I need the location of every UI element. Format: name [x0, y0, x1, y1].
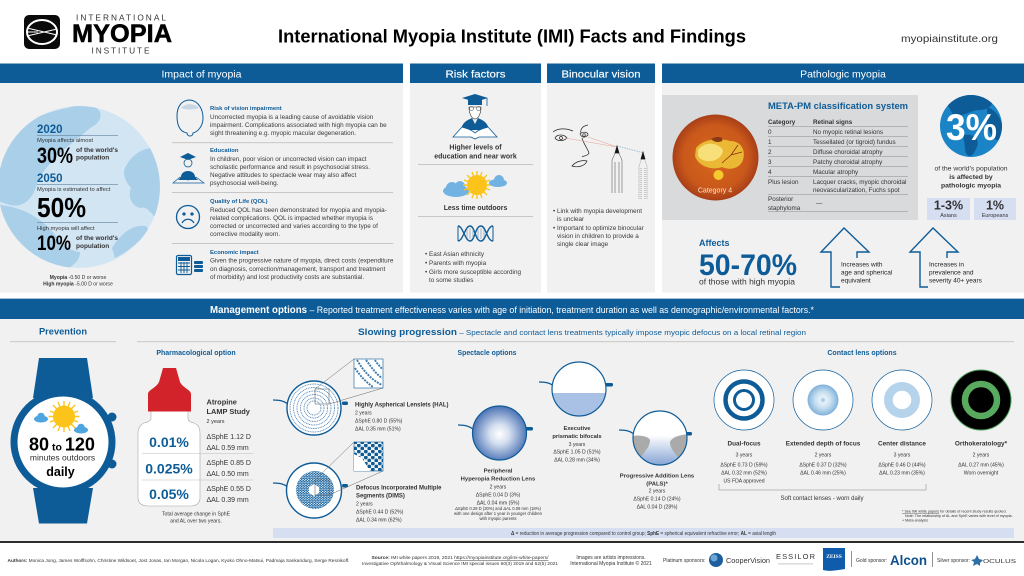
- heading: Pharmacological option: Pharmacological option: [156, 350, 236, 357]
- heading: Contact lens options: Contact lens options: [827, 350, 897, 357]
- source: Source: IMI white papers 2019, 2021 https://myopiainstitute.org/imi-white-papers/: [372, 555, 549, 560]
- panel: Pathologic myopia: [662, 64, 1024, 292]
- text: quality of life: related complications. QOL is impacted whether myopia is: [210, 215, 373, 222]
- heading: Slowing progression: Slowing progression – Spectacle and contact lens treatments typically impose myopic defocus on a local retinal region: [358, 327, 806, 337]
- stat: Europeans: 1%: [986, 198, 1004, 212]
- caption: bottle: [162, 512, 231, 524]
- myopia definitions: High myopia -5.00 D or worse: [43, 282, 113, 288]
- text: HAL: [355, 402, 449, 432]
- contact lens: Dual-focus: ΔSphE 0.73 D (59%): [720, 462, 768, 468]
- bullets: other risk factors: •: [425, 251, 427, 258]
- sponsors: gold: Gold sponsor:: [856, 558, 887, 564]
- contact lens: Center distance: Center distance: [878, 440, 926, 448]
- text: risk of vision impairment: sight threatening e.g. myopic macular degeneration.: [210, 130, 356, 137]
- icon: graduate: [173, 153, 204, 183]
- text: world's population affected: of the world's population: [934, 166, 1008, 172]
- stat: Europeans: Europeans: [982, 213, 1009, 219]
- sponsors: gold: Alcon: [890, 552, 927, 568]
- contact lens: Extended depth of focus: [786, 370, 861, 476]
- text: DIMS: Defocus Incorporated Multiple: [356, 486, 442, 492]
- sun: [48, 401, 80, 432]
- sponsors: platinum: Platinum sponsors:: [663, 558, 706, 564]
- text: DIMS: 2 years: [356, 502, 373, 508]
- bullets: binocular vision: •: [553, 225, 555, 232]
- footnotes: [902, 510, 1013, 522]
- title: International Myopia Institute (IMI) Facts and Findings: [278, 26, 746, 46]
- sponsors: platinum: ZEISS: [826, 554, 842, 560]
- heading: META-PM classification system: META-PM classification system: [768, 101, 908, 112]
- globe illustration: [0, 105, 162, 272]
- bullets: other risk factors: [425, 251, 521, 284]
- text: PALS: (PALS)*: [646, 482, 668, 488]
- stat: Europeans: [974, 198, 1016, 220]
- text: PALS: ΔAL 0.04 D (28%): [637, 504, 678, 510]
- legend bar: Δ = reduction in average progression compared to control group; SphE = spherical equivalent refractive error; AL = axial length: [511, 531, 776, 537]
- text: economic impact: of morbidity) and lost productivity costs are substantial.: [210, 274, 364, 281]
- text: quality of life: [210, 199, 387, 238]
- table: retinal signs: Lacquer cracks, myopic choroidal: [813, 179, 906, 186]
- footnotes: * See IMI white papers for details of recent study results quoted.: [902, 510, 1007, 514]
- text: atropine LAMP study: ΔAL 0.50 mm: [206, 471, 249, 478]
- text: education: Education: [210, 148, 239, 154]
- text: HAL: ΔAL 0.35 mm (51%): [355, 426, 401, 432]
- text: less time outdoors: Less time outdoors: [444, 205, 507, 212]
- contact lens: Dual-focus: US FDA approved: [723, 478, 765, 484]
- stat: 2050: 50%: [37, 192, 86, 223]
- stat: 2020: 30%: [37, 143, 73, 168]
- table: retinal signs: Posterior: [768, 196, 793, 203]
- text: PALS: ΔSphE 0.14 D (24%): [633, 496, 681, 502]
- text: economic impact: Given the progressive nature of myopia, direct costs (expenditure: [210, 258, 394, 264]
- text: atropine LAMP study: 2 years: [206, 419, 225, 425]
- heading: Risk factors: Risk factors: [446, 68, 506, 80]
- text: DIMS: [356, 486, 442, 524]
- icon: atropine bottle: 0.01%: [149, 434, 189, 450]
- bullets: other risk factors: Parents with myopia: [429, 260, 487, 267]
- contact lens: Dual-focus: [714, 370, 774, 484]
- bullets: other risk factors: East Asian ethnicity: [429, 251, 485, 258]
- table: retinal signs: Patchy choroidal atrophy: [813, 159, 883, 166]
- stat: 2050: 10%: [37, 232, 71, 255]
- text: Executive prismatic bifocals: [552, 426, 602, 464]
- text: Executive prismatic bifocals: ΔAL 0.28 mm (34%): [554, 458, 600, 464]
- table: retinal signs: neovascularization, Fuchs spot: [813, 187, 900, 194]
- icon: sad face: [176, 206, 200, 228]
- legend bar: [273, 528, 1014, 538]
- arrow: prevalence and severity: Increases in: [929, 262, 964, 268]
- icon: atropine bottle: 0.025%: [145, 460, 193, 476]
- stat: 2020: of the world's: [76, 147, 118, 154]
- globe: 3 percent: 3%: [946, 107, 997, 148]
- contact lens: Extended depth of focus: ΔSphE 0.37 D (32%): [799, 462, 847, 468]
- myopia definitions: [43, 275, 113, 288]
- bracket: soft contact lenses: [719, 484, 926, 502]
- sponsors: platinum: [663, 548, 852, 571]
- panel: Risk factors: [410, 64, 541, 292]
- arrow: prevalence and severity: [910, 228, 983, 287]
- text: atropine LAMP study: ΔSphE 0.85 D: [206, 460, 251, 467]
- text: world's population affected: [934, 166, 1008, 190]
- stat: 2050: of the world's: [76, 235, 118, 242]
- stat: 2020: population: [76, 154, 109, 162]
- stat: 2050: population: [76, 243, 109, 250]
- contact lens: Orthokeratology: [951, 370, 1011, 476]
- panel: Management options: [0, 298, 1024, 541]
- text: quality of life: corrective modality worn.: [210, 231, 280, 238]
- text: education: Negative attitudes to spectacle wear may also affect: [210, 172, 356, 179]
- bullets: binocular vision: Important to optimize binocular: [557, 225, 644, 232]
- heading: Management options: [0, 298, 1024, 319]
- footer: [0, 541, 1024, 571]
- table: retinal signs: —: [816, 200, 823, 207]
- text: PALS: [620, 474, 695, 510]
- bullets: binocular vision: [553, 208, 644, 248]
- stat: Asians: Asians: [940, 213, 957, 219]
- lens: Executive prismatic bifocals: [539, 362, 613, 464]
- bullets: other risk factors: to some studies: [429, 277, 473, 284]
- text: PALS: Progressive Addition Lens: [620, 474, 695, 480]
- source: [362, 555, 558, 566]
- text: risk of vision impairment: Risk of vision impairment: [210, 106, 282, 112]
- table: retinal signs: 4: [768, 169, 772, 176]
- lens: HAL: [273, 359, 449, 435]
- bullets: binocular vision: is unclear: [557, 216, 584, 223]
- text: Executive prismatic bifocals: Executive: [563, 426, 591, 432]
- icon: watch with outdoor time: [10, 358, 116, 524]
- logo: International Myopia Institute: INTERNATIONAL: [76, 12, 166, 22]
- globe: 3 percent: [940, 92, 1003, 157]
- icon: graduate with book: [453, 94, 497, 139]
- contact lens: Extended depth of focus: 2 years: [815, 452, 832, 458]
- stat: 2050: [37, 173, 118, 255]
- text: risk of vision impairment: impairment. Complications associated with high myopia can be: [210, 122, 387, 129]
- text: Peripheral Hyperopia Reduction Lens: Peripheral: [484, 468, 513, 474]
- table: retinal signs: Plus lesion: [768, 179, 799, 186]
- icon: eye cross section: [177, 100, 203, 136]
- arrow: age and spherical equivalent: age and spherical: [841, 270, 893, 276]
- arrow: prevalence and severity: severity 40+ years: [929, 278, 983, 284]
- bullets: binocular vision: Link with myopia development: [557, 208, 642, 215]
- text: risk of vision impairment: Uncorrected myopia is a leading cause of avoidable vision: [210, 114, 374, 121]
- text: world's population affected: pathologic myopia: [941, 182, 1001, 190]
- stat: 2050: Myopia is estimated to affect: [37, 187, 111, 193]
- text: Peripheral Hyperopia Reduction Lens: [454, 468, 543, 521]
- text: Peripheral Hyperopia Reduction Lens: with one design after 1 year in younger children: [454, 511, 543, 516]
- bullets: other risk factors: •: [425, 260, 427, 267]
- contact lens: Dual-focus: Dual-focus: [727, 440, 761, 448]
- lens: Peripheral Hyperopia Reduction: [454, 406, 543, 521]
- table: retinal signs: Tessellated (or tigroid) fundus: [813, 139, 896, 146]
- text: Peripheral Hyperopia Reduction Lens: ΔSphE 0.04 D (3%): [476, 492, 521, 498]
- text: atropine LAMP study: Atropine: [206, 398, 237, 406]
- heading: Impact of myopia: Impact of myopia: [162, 68, 242, 80]
- stat: Asians: 1-3%: [934, 198, 963, 212]
- META-PM classification panel: [662, 95, 918, 220]
- stat: 2050: High myopia will affect: [37, 226, 95, 232]
- text: atropine LAMP study: ΔAL 0.39 mm: [206, 497, 249, 504]
- stat: 2020: 2020: [37, 124, 63, 136]
- stat: 2020: Myopia affects almost: [37, 138, 93, 144]
- text: DIMS: Segments (DIMS): [356, 494, 405, 500]
- sponsors: silver: Silver sponsor:: [937, 558, 970, 564]
- arrow: age and spherical equivalent: [821, 228, 893, 287]
- bullets: other risk factors: Girls more susceptible according: [429, 269, 521, 276]
- stat: 50-70 percent: 50-70%: [699, 249, 797, 282]
- clouds: [34, 413, 88, 434]
- heading: Binocular vision: Binocular vision: [562, 68, 641, 80]
- text: world's population affected: is affected by: [949, 174, 993, 181]
- logo: International Myopia Institute: INSTITUTE: [92, 46, 150, 56]
- caption: bottle: and AL over two years.: [170, 518, 222, 524]
- text: quality of life: Reduced QOL has been demonstrated for myopia and myopia-: [210, 207, 387, 214]
- contact lens: Orthokeratology: Orthokeratology*: [955, 440, 1008, 448]
- stat: 50-70 percent: of those with high myopia: [699, 276, 795, 286]
- heading: Impact of myopia: [0, 64, 403, 83]
- fundus photograph: Category 4: [698, 188, 732, 194]
- text: education and near work: [434, 144, 517, 160]
- icon: sun and clouds: [443, 171, 507, 199]
- text: PALS: 2 years: [649, 488, 666, 494]
- contact lens: Dual-focus: ΔAL 0.32 mm (52%): [721, 470, 767, 476]
- text: HAL: 2 years: [355, 410, 372, 416]
- table: retinal signs: 1: [768, 139, 772, 146]
- table: retinal signs: Category: [768, 119, 796, 126]
- table: retinal signs: 2: [768, 149, 772, 156]
- text: Executive prismatic bifocals: ΔSphE 1.05 D (51%): [553, 450, 601, 456]
- icon: watch with outdoor time: minutes outdoors: [30, 452, 95, 462]
- contact lens: Orthokeratology: 2 years: [973, 452, 990, 458]
- text: atropine LAMP study: [206, 398, 251, 504]
- table: retinal signs: Macular atrophy: [813, 169, 859, 176]
- text: atropine LAMP study: LAMP Study: [206, 407, 251, 416]
- text: atropine LAMP study: ΔSphE 0.55 D: [206, 486, 251, 493]
- panel: Binocular vision: [547, 64, 655, 292]
- icon: watch with outdoor time: daily: [46, 465, 75, 479]
- text: education and near work: education and near work: [434, 154, 517, 160]
- heading: Spectacle options: Spectacle options: [458, 350, 517, 357]
- bracket: soft contact lenses: Soft contact lenses - worn daily: [780, 496, 864, 502]
- arrow: age and spherical equivalent: equivalent: [841, 278, 871, 284]
- arrow: prevalence and severity: prevalence and: [929, 270, 974, 276]
- footnotes: Note: The relationship of AL and SphE varies with level of myopia.: [905, 514, 1013, 518]
- watch text: 80 to 120: [29, 434, 95, 454]
- authors: Authors: Monica Jong, James Wolffsohn, Christine Wildsoet, Jost Jonas, Ian Morgan, Nicola Logan, Kyoko Ohno-Matsui, Padmaja Sankaridurg, Serge Resnikoff.: [8, 558, 350, 563]
- heading: Pathologic myopia: Pathologic myopia: [800, 68, 886, 80]
- text: Peripheral Hyperopia Reduction Lens: with myopic parents: [479, 516, 517, 521]
- text: Peripheral Hyperopia Reduction Lens: ΔAL 0.04 mm (5%): [477, 500, 520, 506]
- illustration: eyes and pencils: [553, 125, 647, 199]
- contact lens: Center distance: ΔSphE 0.46 D (44%): [878, 462, 926, 468]
- table: retinal signs: [768, 119, 908, 212]
- contact lens: Orthokeratology: ΔAL 0.27 mm (45%): [958, 462, 1004, 468]
- bullets: other risk factors: •: [425, 269, 427, 276]
- text: Executive prismatic bifocals: 3 years: [569, 442, 586, 448]
- image credit: [570, 555, 652, 567]
- text: risk of vision impairment: [210, 106, 387, 137]
- sponsors: gold: [856, 552, 933, 568]
- icon: DNA helix: [458, 226, 493, 241]
- text: DIMS: ΔAL 0.34 mm (62%): [356, 518, 402, 524]
- arrow: age and spherical equivalent: Increases with: [841, 262, 883, 268]
- heading: Binocular vision: [547, 64, 655, 83]
- fundus photograph: [672, 114, 758, 200]
- table: retinal signs: staphyloma: [768, 205, 801, 212]
- text: education: psychosocial well-being.: [210, 180, 279, 187]
- image credit: Images are artists impressions.: [576, 555, 646, 561]
- website: myopiainstitute.org: [901, 33, 998, 45]
- text: quality of life: corrected or uncorrected and varies according to the type of: [210, 223, 378, 230]
- text: economic impact: on diagnosis, correction/management, transport and treatment: [210, 266, 385, 273]
- lens: DIMS: [273, 442, 442, 524]
- table: retinal signs: No myopic retinal lesions: [813, 129, 883, 136]
- bullets: binocular vision: single clear image: [557, 241, 609, 248]
- contact lens: Center distance: 3 years: [894, 452, 911, 458]
- text: education and near work: Higher levels of: [449, 144, 502, 152]
- source: Investigative Ophthalmology & Visual Science IMI special issues 60(3) 2019 and 62(5) 2021: [362, 561, 558, 566]
- text: education: [210, 148, 370, 187]
- text: quality of life: Quality of Life (QOL): [210, 199, 268, 205]
- heading: Prevention: [10, 326, 116, 342]
- icon: atropine bottle: 0.05%: [149, 486, 189, 502]
- image credit: International Myopia Institute © 2021: [570, 560, 652, 567]
- sponsors: silver: OCULUS: [983, 559, 1016, 565]
- text: Executive prismatic bifocals: prismatic bifocals: [552, 434, 602, 440]
- table: retinal signs: Diffuse choroidal atrophy: [813, 149, 883, 156]
- contact lens: Orthokeratology: Worn overnight: [964, 470, 999, 476]
- logo: International Myopia Institute: [24, 12, 172, 56]
- contact lens: Center distance: [872, 370, 932, 476]
- caption: bottle: Total average change in SphE: [162, 512, 231, 518]
- table: retinal signs: Retinal signs: [813, 119, 853, 126]
- table: retinal signs: 3: [768, 159, 772, 166]
- text: Peripheral Hyperopia Reduction Lens: Hyperopia Reduction Lens: [461, 476, 536, 482]
- lens: Progressive Addition Lens: [619, 411, 695, 510]
- text: economic impact: Economic impact: [210, 250, 259, 256]
- heading: Risk factors: [410, 64, 541, 83]
- stat: 50-70 percent: Affects: [699, 238, 730, 248]
- sponsors: platinum: ESSILOR: [776, 552, 816, 561]
- heading: Pathologic myopia: [662, 64, 1024, 83]
- stat: Asians: [927, 198, 970, 220]
- logo: International Myopia Institute: MYOPIA: [72, 20, 172, 48]
- stat: 50-70 percent: [699, 238, 797, 286]
- text: Peripheral Hyperopia Reduction Lens: ΔSphE 0.29 D (30%) and ΔAL 0.09 mm (18%): [455, 506, 541, 511]
- footnotes: + Meta-analysis: [902, 518, 928, 522]
- heading: Management options: Management options – Reported treatment effectiveness varies with age of initiation, treatment duration as well as demographic/environmental factors.*: [210, 304, 814, 316]
- contact lens: Center distance: ΔAL 0.23 mm (35%): [879, 470, 925, 476]
- contact lens: Dual-focus: 3 years: [736, 452, 753, 458]
- contact lens: Extended depth of focus: ΔAL 0.46 mm (25%): [800, 470, 846, 476]
- table: retinal signs: 0: [768, 129, 772, 136]
- stat: 2050: 2050: [37, 173, 63, 185]
- text: HAL: ΔSphE 0.80 D (55%): [355, 418, 403, 424]
- text: atropine LAMP study: ΔAL 0.59 mm: [206, 445, 249, 452]
- text: education: scholastic performance and result in psychosocial stress.: [210, 164, 370, 171]
- heading: Prevention: Prevention: [39, 326, 87, 336]
- stat: 2020: [37, 124, 118, 168]
- text: HAL: Highly Aspherical Lenslets (HAL): [355, 402, 449, 408]
- sponsors: silver: [937, 555, 1016, 566]
- text: education: In children, poor vision or uncorrected vision can impact: [210, 156, 367, 163]
- contact lens: Extended depth of focus: Extended depth of focus: [786, 440, 861, 448]
- text: atropine LAMP study: ΔSphE 1.12 D: [206, 434, 251, 441]
- text: economic impact: [210, 250, 394, 281]
- icon: atropine bottle: [138, 368, 253, 506]
- sponsors: platinum: CooperVision: [726, 556, 770, 565]
- icon: calculator and coins: [176, 256, 203, 274]
- myopia definitions: Myopia -0.50 D or worse: [50, 275, 106, 281]
- bullets: binocular vision: •: [553, 208, 555, 215]
- panel: Impact of myopia: [0, 64, 403, 292]
- bullets: binocular vision: vision in children to provide a: [557, 233, 639, 240]
- text: DIMS: ΔSphE 0.44 D (52%): [356, 510, 404, 516]
- text: Peripheral Hyperopia Reduction Lens: 2 years: [490, 484, 507, 490]
